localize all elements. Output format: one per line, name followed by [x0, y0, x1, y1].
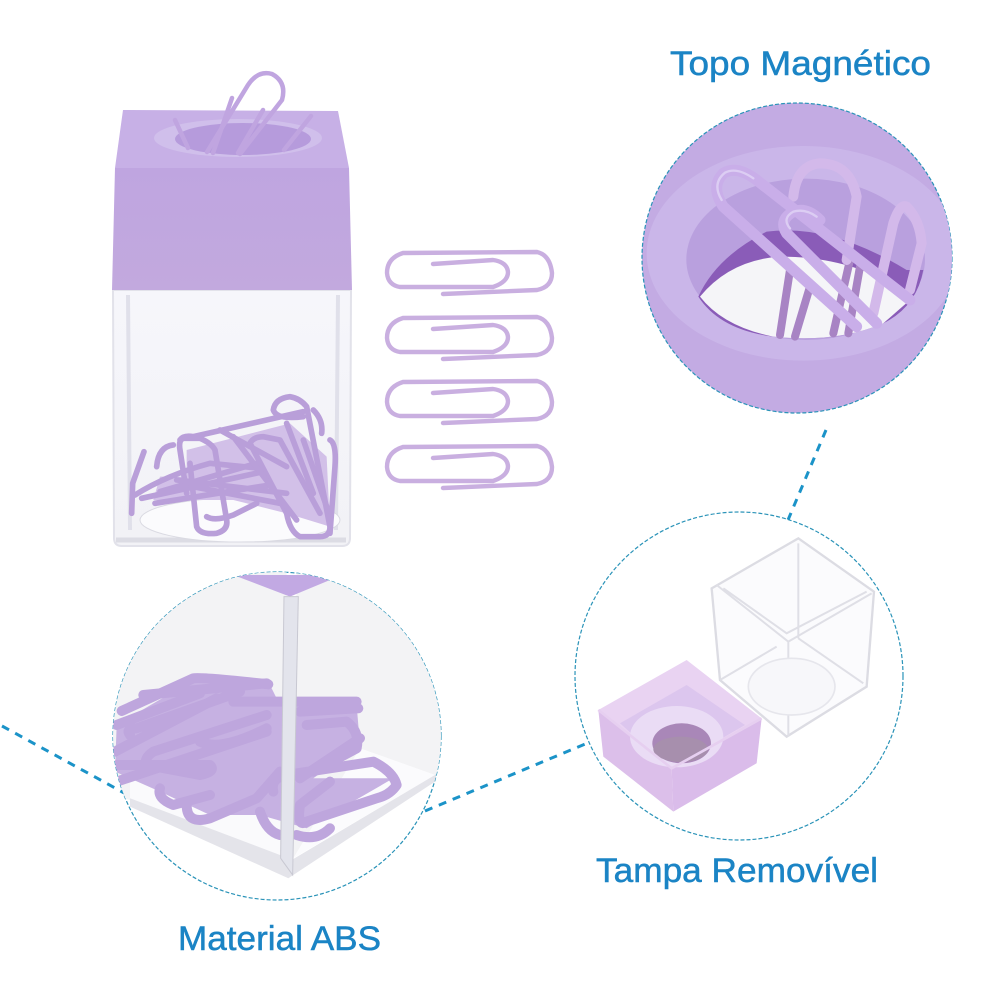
heading: Material ABS: Material ABS: [178, 920, 381, 958]
panel: ABS material detail: [100, 565, 450, 900]
connector: top to lid detail: [788, 430, 826, 520]
floor: [293, 748, 435, 858]
back clip legs: [780, 260, 860, 337]
dark reflection band: [698, 230, 923, 338]
clear box body: [113, 290, 351, 546]
flat paper clips: [387, 252, 552, 488]
product: clip holder: [112, 73, 352, 546]
heading: Tampa Removível: Tampa Removível: [596, 852, 878, 890]
walls: [113, 572, 287, 842]
hole wall: [686, 179, 925, 340]
corner strut: [281, 597, 298, 875]
mirror base: [700, 257, 910, 338]
heading: Topo Magnético: Topo Magnético: [670, 45, 931, 83]
clip highlights: [717, 171, 817, 228]
clips in opening: [175, 73, 311, 154]
clips inside box: [132, 397, 335, 537]
lid front face: [112, 168, 352, 290]
clip pile: [115, 678, 397, 837]
lid corner: [233, 575, 330, 597]
lid top face: [115, 110, 349, 168]
connector: lid detail to material: [425, 742, 590, 811]
panel: magnetic top detail: [642, 103, 960, 413]
lilac lid upside down: [598, 660, 762, 812]
back clips: [793, 163, 922, 313]
clear cube: [712, 538, 874, 737]
front clips: [717, 170, 910, 327]
recessed ring: [647, 146, 960, 361]
box floor disc: [140, 498, 340, 542]
lid opening: [154, 119, 322, 157]
panel: removable lid detail: [575, 512, 903, 840]
lid opening interior: [175, 123, 311, 155]
base lip: [130, 775, 440, 878]
lid: [112, 110, 352, 290]
connector: left edge to material: [2, 726, 126, 794]
